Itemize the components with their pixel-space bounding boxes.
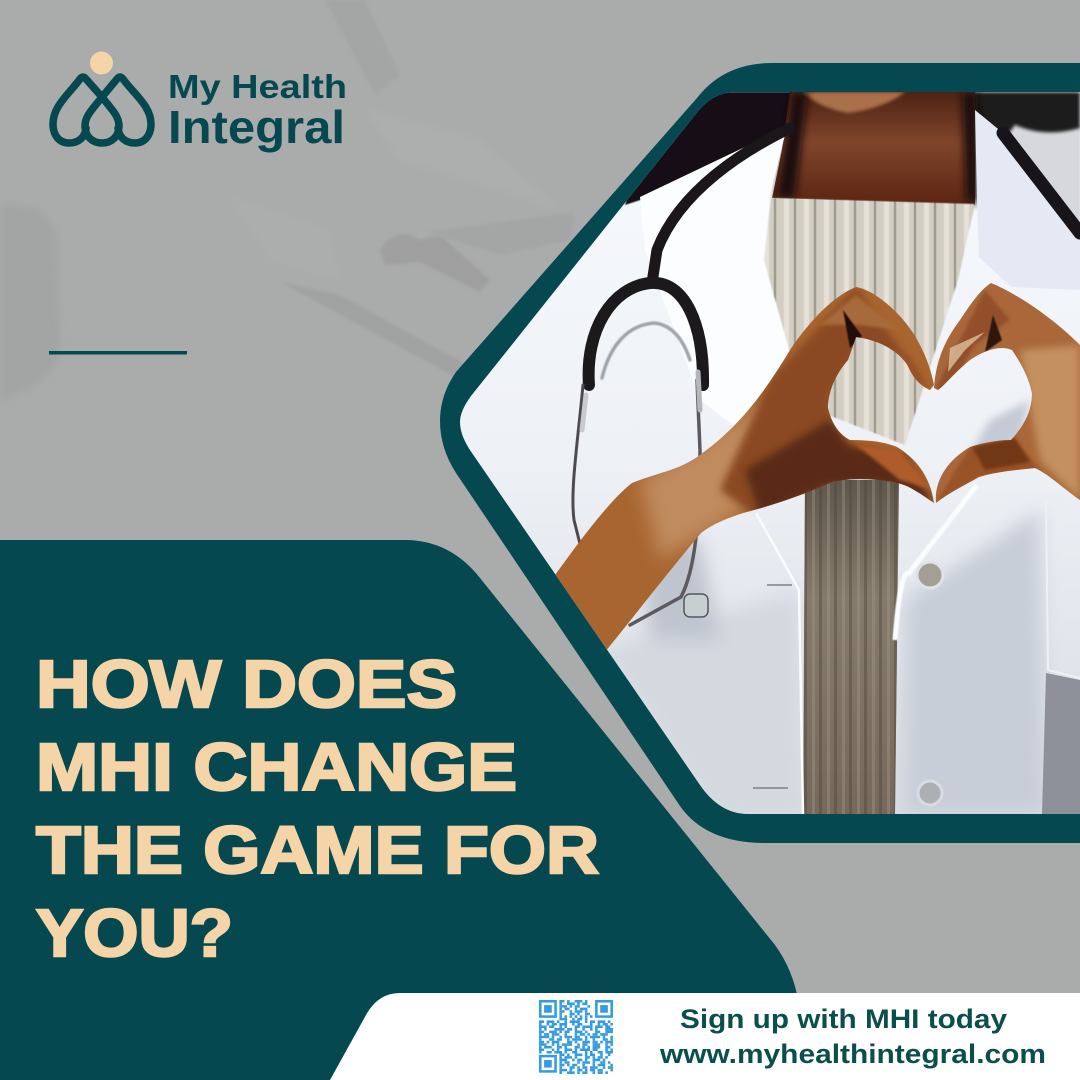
neck [772, 92, 975, 205]
title line 4: YOU? [36, 896, 233, 971]
logo wordmark line 2: Integral [168, 101, 345, 153]
coat collar right [975, 110, 1080, 290]
QR code [539, 1001, 613, 1073]
sign up text: Sign up with MHI today [680, 1004, 1007, 1034]
website url: www.myhealthintegral.com [659, 1039, 1046, 1069]
neck shadow edges [776, 92, 978, 205]
logo mark [53, 77, 151, 143]
upper sweater [764, 198, 975, 445]
photo: doctor making heart shape with hands [440, 80, 1080, 820]
title line 3: THE GAME FOR [36, 813, 599, 888]
right hand [930, 275, 1080, 510]
photo frame: teal hexagon [440, 63, 1080, 843]
logo dot [90, 52, 113, 74]
stethoscope tube [573, 128, 1080, 625]
title: how does MHI change the game for you [36, 647, 599, 971]
forearm and left hand [556, 287, 934, 650]
title line 1: HOW DOES [36, 647, 457, 722]
coat shading [600, 400, 1080, 814]
coat buttons and seams [753, 485, 977, 814]
stethoscope chest piece [684, 594, 708, 617]
title panel [0, 540, 798, 1080]
call to action [659, 1004, 1046, 1069]
footer band [330, 993, 1080, 1080]
lower sweater [803, 480, 899, 814]
chin [802, 92, 905, 113]
accent divider [49, 351, 187, 354]
logo wordmark line 1: My Health [168, 68, 347, 105]
backdrop and hair [624, 92, 1080, 222]
logo: My Health Integral [53, 52, 347, 153]
title line 2: MHI CHANGE [36, 730, 517, 805]
coat collar left [640, 136, 789, 426]
